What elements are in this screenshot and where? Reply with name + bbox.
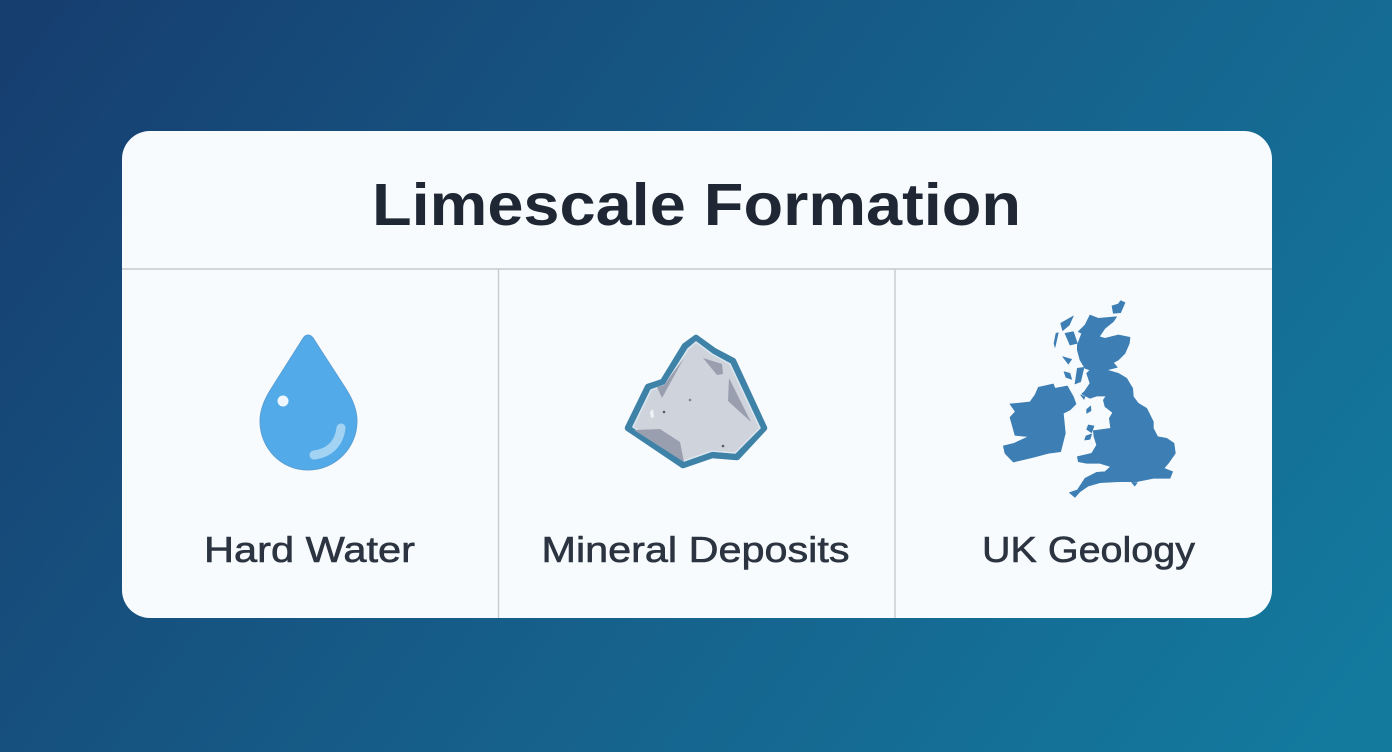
icon: uk and ireland map: [1003, 301, 1175, 497]
column: mineral deposits: [542, 338, 850, 570]
icon: water drop: [260, 335, 357, 470]
label: hard water: Hard Water: [204, 529, 415, 570]
panel: limescale formation card: [122, 131, 1272, 618]
column: uk geology: [982, 301, 1195, 570]
icon: mineral rock: [628, 338, 764, 465]
label: mineral deposits: Mineral Deposits: [542, 529, 850, 570]
label: uk geology: UK Geology: [982, 529, 1195, 570]
title: Limescale Formation: [372, 172, 1021, 238]
column: hard water: [204, 335, 415, 570]
